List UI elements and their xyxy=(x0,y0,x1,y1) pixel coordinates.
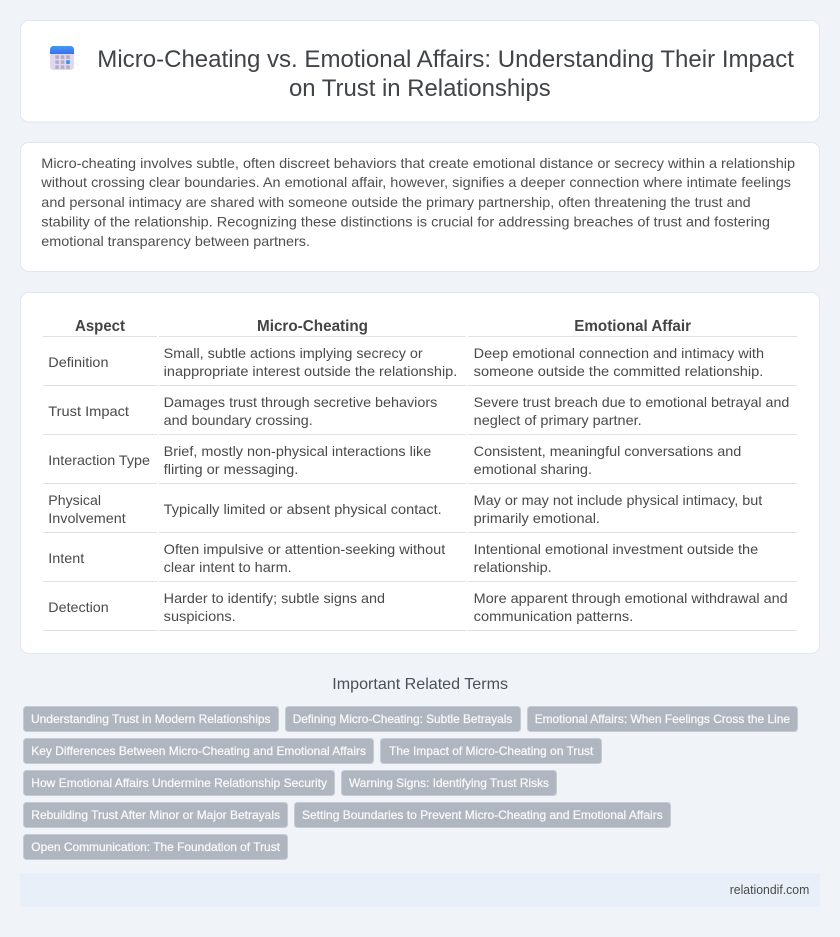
table row: physical involvement: May or may not include physical intimacy, but xyxy=(474,492,762,508)
table row: detection xyxy=(48,590,788,624)
table row: interaction type: Interaction Type xyxy=(48,452,150,468)
tag xyxy=(24,738,374,764)
table row: detection: communication patterns. xyxy=(474,608,633,624)
panel: title header xyxy=(20,20,820,122)
tag xyxy=(528,706,798,732)
table row: physical involvement: primarily emotional. xyxy=(474,510,600,526)
tag xyxy=(342,770,556,796)
table row: definition: Deep emotional connection and intimacy with xyxy=(474,345,764,361)
table row: interaction type: Brief, mostly non-physical interactions like xyxy=(164,443,432,459)
table row: trust impact: Trust Impact xyxy=(48,403,129,419)
tag: Setting Boundaries to Prevent Micro-Cheating and Emotional Affairs xyxy=(302,808,663,822)
table row: intent: relationship. xyxy=(474,559,552,575)
table row: physical involvement: Involvement xyxy=(48,510,126,526)
tag: Rebuilding Trust After Minor or Major Betrayals xyxy=(31,808,280,822)
table row: definition: Definition xyxy=(48,354,108,370)
panel: related term tags xyxy=(24,706,798,860)
table row: trust impact: neglect of primary partner. xyxy=(474,412,642,428)
table row: physical involvement: Physical xyxy=(48,492,101,508)
tag: Defining Micro-Cheating: Subtle Betrayals xyxy=(293,712,512,726)
table row: intent xyxy=(48,541,759,575)
tag xyxy=(294,802,670,828)
table header row: Aspect xyxy=(75,318,126,335)
tag: Open Communication: The Foundation of Trust xyxy=(31,840,281,854)
tag xyxy=(380,738,602,764)
table header row: Micro-Cheating xyxy=(257,318,368,335)
tag: Understanding Trust in Modern Relationships xyxy=(31,712,270,726)
footer xyxy=(20,873,820,907)
table row: detection: Harder to identify; subtle signs and xyxy=(164,590,385,606)
tag xyxy=(24,770,334,796)
icon: calendar xyxy=(50,46,74,70)
table row: intent: clear intent to harm. xyxy=(164,559,292,575)
text block: intro: and personal intimacy are shared with someone outside the primary partnership, often threatening the trust and xyxy=(41,194,751,210)
title: on Trust in Relationships xyxy=(289,75,551,102)
heading: related terms: Important Related Terms xyxy=(332,676,508,693)
table row: physical involvement: Typically limited or absent physical contact. xyxy=(164,501,442,517)
table row: trust impact: Damages trust through secretive behaviors xyxy=(164,394,437,410)
table header row: Emotional Affair xyxy=(574,318,691,335)
table row: definition: Small, subtle actions implying secrecy or xyxy=(164,345,423,361)
table row: definition: inappropriate interest outside the relationship. xyxy=(164,363,457,379)
footer: relationdif.com xyxy=(730,883,809,897)
table row: detection: suspicions. xyxy=(164,608,236,624)
tag: Key Differences Between Micro-Cheating and Emotional Affairs xyxy=(31,744,366,758)
table row: physical involvement xyxy=(48,492,762,526)
table row: intent: Often impulsive or attention-seeking without xyxy=(164,541,445,557)
table row: interaction type: emotional sharing. xyxy=(474,461,592,477)
tag xyxy=(24,834,288,860)
table row: interaction type: Consistent, meaningful conversations and xyxy=(474,443,741,459)
table row: interaction type: flirting or messaging. xyxy=(164,461,298,477)
text block: intro: stability of the relationship. Recognizing these distinctions is crucial for addressing breaches of trust and fostering xyxy=(41,214,770,230)
table row: intent: Intentional emotional investment outside the xyxy=(474,541,759,557)
text block: intro: without crossing clear boundaries. An emotional affair, however, signifies a deeper connection where intimate feelings xyxy=(40,174,791,190)
tag: Warning Signs: Identifying Trust Risks xyxy=(349,776,549,790)
text block: intro: emotional transparency between partners. xyxy=(41,233,310,249)
table row: trust impact: Severe trust breach due to emotional betrayal and xyxy=(474,394,789,410)
panel: comparison table xyxy=(20,292,820,654)
table row: definition xyxy=(48,345,764,379)
text block: intro xyxy=(40,155,795,249)
tag: How Emotional Affairs Undermine Relationship Security xyxy=(31,776,327,790)
table row: detection: More apparent through emotional withdrawal and xyxy=(474,590,788,606)
tag xyxy=(24,802,288,828)
panel: intro paragraph xyxy=(20,142,820,272)
title: Micro-Cheating vs. Emotional Affairs: Understanding Their Impact xyxy=(97,46,794,73)
table row: trust impact: and boundary crossing. xyxy=(164,412,313,428)
text block: intro: Micro-cheating involves subtle, often discreet behaviors that create emotional distance or secrecy within a relationship xyxy=(41,155,795,171)
tag: Emotional Affairs: When Feelings Cross the Line xyxy=(535,712,790,726)
tag: The Impact of Micro-Cheating on Trust xyxy=(389,744,594,758)
table header row xyxy=(75,318,691,335)
tag xyxy=(286,706,520,732)
tag xyxy=(24,706,278,732)
title xyxy=(97,46,794,102)
table row: interaction type xyxy=(48,443,741,477)
table row: definition: someone outside the committed relationship. xyxy=(474,363,763,379)
table row: trust impact xyxy=(48,394,789,428)
table row: intent: Intent xyxy=(48,550,84,566)
table row: detection: Detection xyxy=(48,599,109,615)
